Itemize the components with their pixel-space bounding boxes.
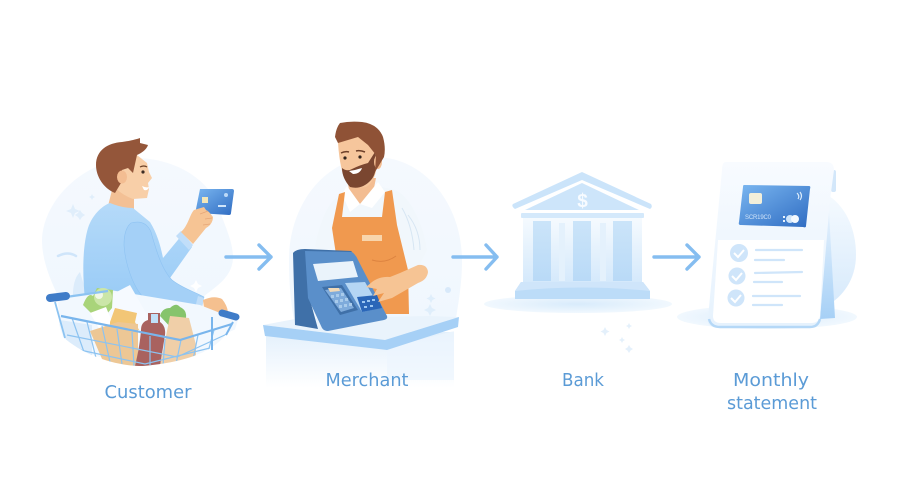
ear [374, 155, 382, 169]
lower arm [124, 222, 204, 313]
basket and groceries [50, 285, 238, 370]
document [708, 162, 834, 328]
panel: bank [484, 172, 672, 391]
credit card held [196, 189, 234, 215]
body [523, 218, 642, 286]
ear [117, 170, 127, 184]
dollar sign: $ [577, 191, 588, 212]
head [338, 135, 377, 188]
arrow: merchant to bank [453, 245, 497, 269]
merchant background blob [289, 157, 462, 325]
counter [263, 316, 459, 388]
customer background blob [42, 158, 233, 300]
base [515, 282, 650, 299]
arrow: customer to merchant [226, 245, 271, 269]
sweater body [83, 203, 192, 335]
terminal face [305, 251, 387, 331]
sparkles [445, 287, 451, 293]
forearm and hand on keypad [366, 265, 428, 302]
hair [96, 138, 148, 193]
bank ground ellipse [484, 295, 672, 313]
neck [108, 186, 134, 210]
document white lower area [713, 240, 824, 323]
bottle [135, 313, 165, 366]
basket wire rim [61, 316, 232, 340]
hair [335, 122, 385, 172]
sparkles [66, 194, 95, 220]
keypad right [345, 282, 380, 312]
yellow box [110, 308, 139, 330]
bank building [512, 172, 652, 299]
panels [533, 221, 551, 281]
neck [347, 178, 376, 204]
label: merchant: Merchant [326, 370, 408, 391]
person: customer [73, 138, 234, 335]
label: monthly statement: statement [727, 393, 817, 414]
label: monthly statement: Monthly [733, 370, 809, 391]
cuff raised [176, 231, 193, 250]
entablature [521, 213, 644, 218]
document bottom edge [709, 319, 820, 327]
terminal left side [293, 249, 352, 329]
person: merchant [315, 122, 427, 314]
apron [332, 190, 409, 314]
keypad left [322, 285, 358, 315]
counter edge [263, 317, 459, 350]
raised hand [181, 207, 213, 244]
checklist [728, 244, 802, 306]
panel: monthly statement [677, 162, 857, 414]
back circle [826, 194, 856, 305]
fold [820, 195, 835, 319]
label: monthly statement [727, 370, 817, 414]
counter top [263, 316, 459, 340]
beard [342, 152, 377, 188]
statement card [739, 185, 810, 227]
white paper [90, 307, 110, 328]
arrow: bank to statement [654, 245, 699, 269]
shirt [315, 186, 427, 275]
statement card: SCR19C0 [745, 215, 772, 221]
panel: customer [42, 138, 238, 403]
right bag [160, 316, 196, 366]
head [114, 155, 152, 199]
apron pocket [362, 235, 382, 241]
basket inner [58, 290, 238, 357]
counter front gradient [266, 332, 454, 388]
sparkles [600, 323, 633, 353]
label: bank: Bank [562, 370, 605, 391]
white carton [118, 285, 136, 294]
cuff lower [194, 296, 204, 314]
panel: merchant [263, 122, 462, 391]
green leaves [83, 288, 113, 313]
wire grid [67, 318, 227, 366]
label: customer: Customer [104, 382, 192, 403]
eyes [343, 156, 347, 160]
lower hand [203, 297, 228, 316]
tab [831, 170, 836, 192]
ground ellipse [677, 305, 857, 329]
tan bag [90, 322, 138, 366]
collar [342, 182, 385, 212]
basket handles [50, 296, 66, 298]
roof [512, 172, 652, 209]
POS terminal [293, 249, 387, 331]
